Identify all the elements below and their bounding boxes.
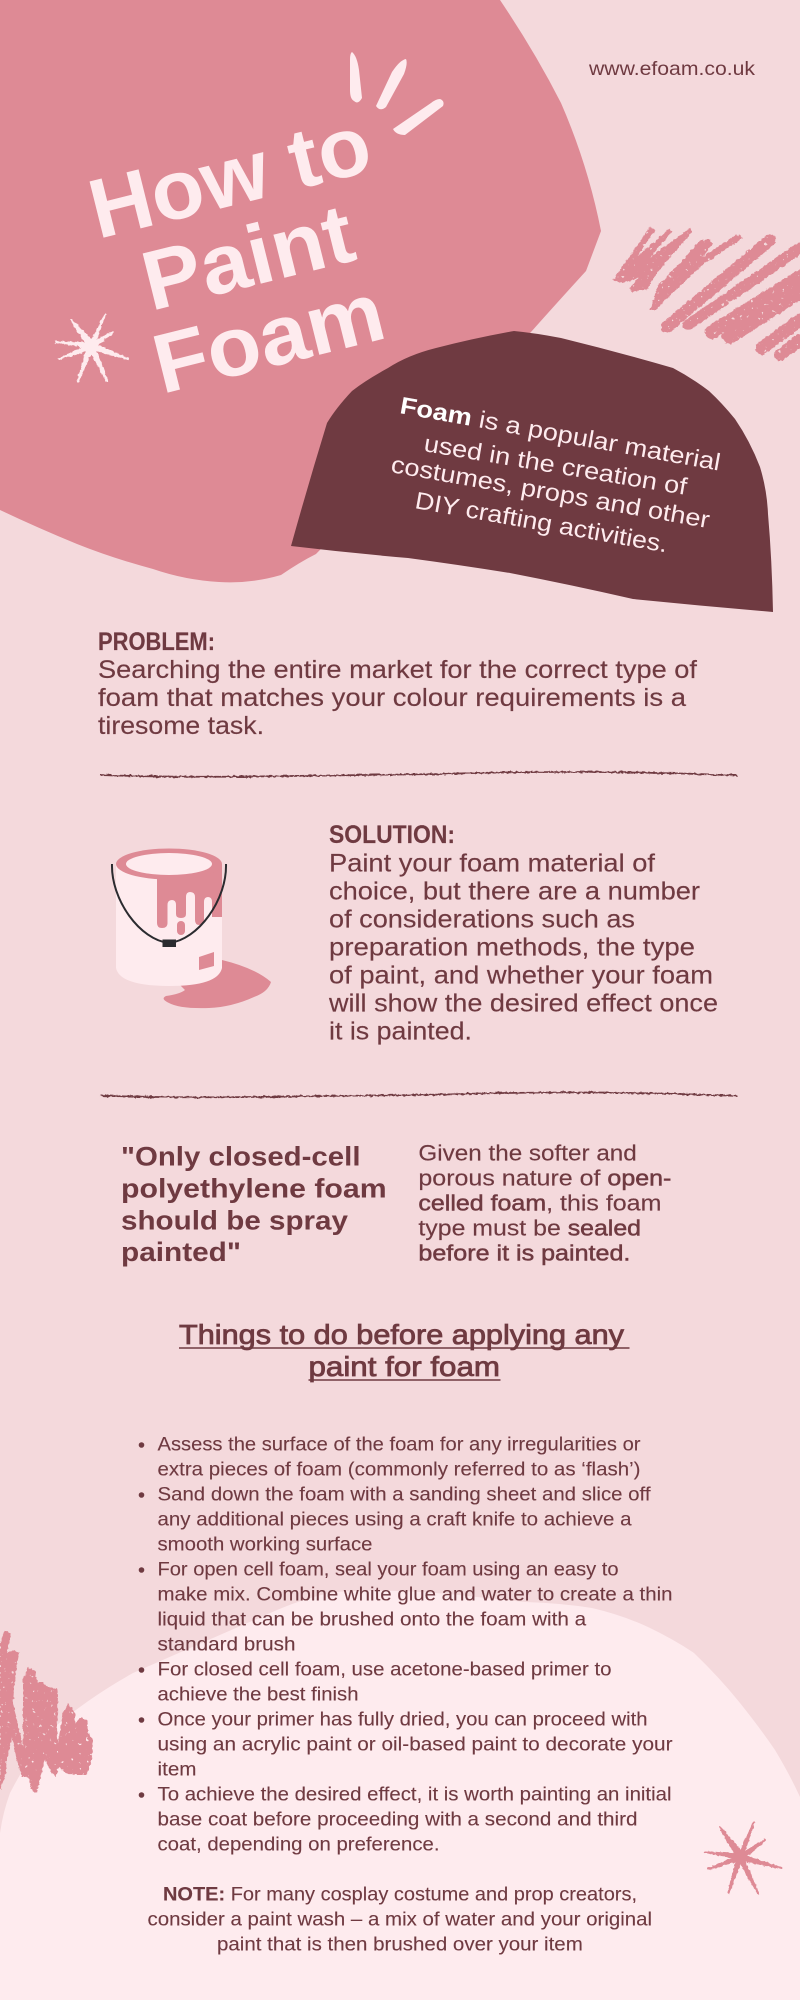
bullet 4 [139,1659,612,1706]
problem text block: Searching the entire market for the correct type of [98,656,697,684]
bullet 5: using an acrylic paint or oil-based paint to decorate your [158,1734,673,1756]
note: NOTE: For many cosplay costume and prop creators, [163,1884,637,1906]
problem text block: PROBLEM: [98,628,215,656]
paint puddle [164,960,271,1008]
pull quote: "Only closed-cell [121,1142,360,1172]
heading: things to do: Things to do before applying any [179,1319,624,1350]
bullet 3: liquid that can be brushed onto the foam with a [158,1609,586,1631]
open-cell note: before it is painted. [418,1241,630,1266]
note: consider a paint wash – a mix of water and your original [148,1909,652,1931]
rim [116,848,222,880]
heading: things to do [179,1319,630,1382]
bullet 2: smooth working surface [158,1534,372,1556]
checklist [139,1434,673,1856]
open-cell note: type must be sealed [418,1216,641,1241]
rim inner [126,853,212,875]
bullet 1 [139,1434,641,1481]
icon: white star [56,315,128,381]
heading: things to do: paint for foam [308,1351,500,1382]
bullet 2: Sand down the foam with a sanding sheet and slice off [158,1484,651,1506]
problem text block: foam that matches your colour requirements is a [98,684,686,712]
bullet 3 [139,1559,672,1656]
bullet 5 [139,1709,673,1781]
bullet 1: Assess the surface of the foam for any irregularities or [158,1434,641,1456]
note: paint that is then brushed over your item [217,1934,583,1956]
bullet 6 [139,1784,671,1856]
title: Paint [133,185,363,328]
open-cell note: celled foam , this foam [418,1191,661,1216]
pull quote: polyethylene foam [121,1174,387,1204]
intro text [389,392,723,558]
solution text block: of paint, and whether your foam [329,962,713,990]
website url: www.efoam.co.uk [588,58,755,80]
solution text block: it is painted. [329,1018,472,1046]
scribble: left [0,1630,93,1793]
bullet 2 [139,1484,651,1556]
pull quote: should be spray [121,1206,348,1236]
bucket body [116,864,222,986]
solution text block: Paint your foam material of [329,850,655,878]
open-cell note [418,1141,671,1266]
title: How to [80,96,380,256]
intro text: costumes, props and other [389,451,712,534]
label [199,952,214,970]
solution text block: preparation methods, the type [329,934,695,962]
pull quote [121,1142,387,1267]
scribble: top right [613,227,800,355]
pull quote: painted" [121,1237,241,1267]
bullet 2: any additional pieces using a craft knife to achieve a [158,1509,632,1531]
open-cell note: Given the softer and [418,1141,637,1166]
title [80,96,393,411]
paint droplet [177,921,185,935]
bullet 3: For open cell foam, seal your foam using an easy to [158,1559,619,1581]
light bottom blob [0,1591,800,2000]
bullet 4: achieve the best finish [158,1684,358,1706]
title: Foam [144,264,393,411]
handle [112,864,226,943]
problem text block: tiresome task. [98,712,264,740]
handle clip [162,940,176,947]
intro text: Foam is a popular material [398,392,723,476]
intro text: DIY crafting activities. [413,487,670,558]
icon: sparkle strokes [350,52,444,135]
icon: pink star [705,1822,781,1893]
solution text block: choice, but there are a number [329,878,700,906]
problem text block [98,628,697,740]
dark intro blob [291,331,773,612]
intro text: used in the creation of [422,430,689,501]
bullet 5: Once your primer has fully dried, you can proceed with [158,1709,648,1731]
solution text block: will show the desired effect once [328,990,718,1018]
bullet 3: make mix. Combine white glue and water to create a thin [158,1584,672,1606]
bullet 3: standard brush [158,1634,296,1656]
solution text block: SOLUTION: [329,821,455,849]
bullet 6: coat, depending on preference. [158,1834,440,1856]
paint drips [157,864,222,928]
pink header blob [0,0,601,582]
solution text block [328,821,718,1046]
bullet 6: To achieve the desired effect, it is worth painting an initial [158,1784,672,1806]
solution text block: of considerations such as [329,906,635,934]
note [148,1884,652,1956]
open-cell note: porous nature of open- [418,1166,671,1191]
bullet 4: For closed cell foam, use acetone-based primer to [158,1659,612,1681]
icon: paint bucket [112,848,271,1008]
bullet 6: base coat before proceeding with a second and third [158,1809,638,1831]
bullet 1: extra pieces of foam (commonly referred to as ‘flash’) [158,1459,640,1481]
bullet 5: item [158,1759,196,1781]
